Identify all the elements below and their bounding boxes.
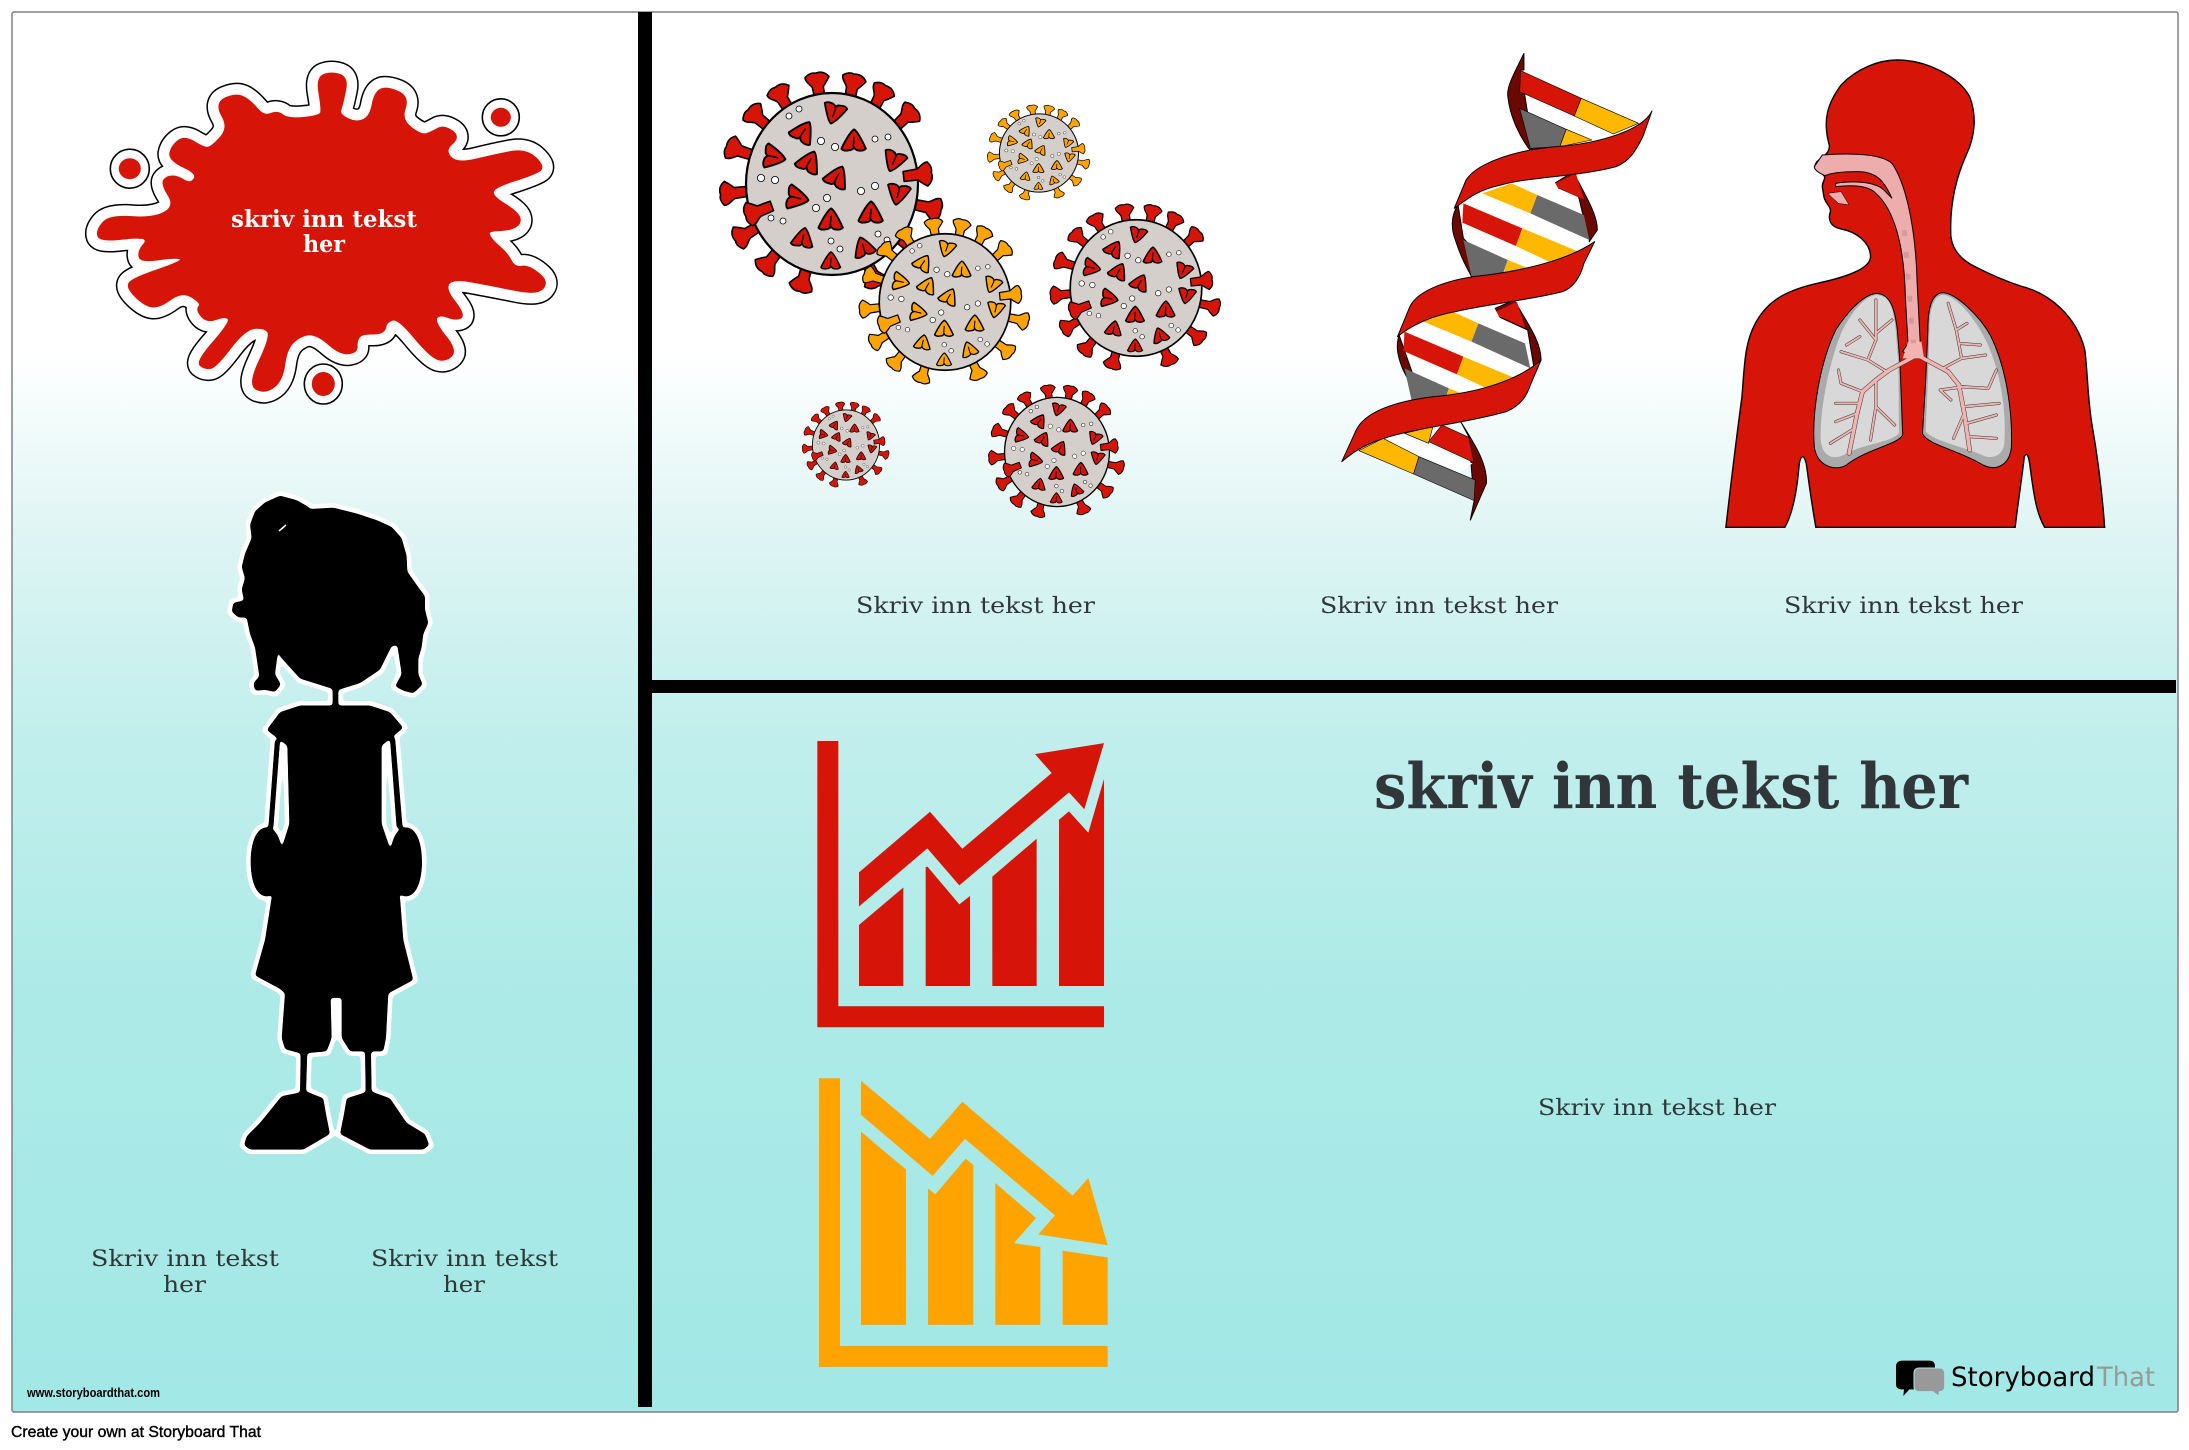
icon: virus cluster [719, 71, 1222, 519]
text: website url: www.storyboardthat.com [26, 1385, 160, 1400]
callout: red splat with text [98, 74, 544, 404]
horizontal divider [652, 680, 2176, 693]
footer text: Create your own at Storyboard That [11, 1424, 262, 1441]
text: body placeholder: Skriv inn tekst her [1538, 1096, 1777, 1121]
text: left captions: her [443, 1273, 486, 1298]
text: left captions: her [163, 1273, 207, 1298]
text: top captions [856, 594, 2024, 619]
vertical divider [638, 12, 652, 1407]
text: left captions: Skriv inn tekst [371, 1247, 558, 1272]
text: top captions: Skriv inn tekst her [1784, 594, 2024, 619]
icon: respiratory system [1726, 60, 2105, 527]
logo: Storyboard That [1896, 1361, 2155, 1396]
text: left captions: Skriv inn tekst [91, 1247, 279, 1272]
icon: DNA helix [1342, 53, 1652, 520]
callout: red splat with text: skriv inn tekst [231, 206, 417, 233]
text: top captions: Skriv inn tekst her [856, 594, 1096, 619]
icon: girl silhouette [232, 496, 429, 1150]
logo: Storyboard That: That [2096, 1362, 2155, 1393]
icon: falling bar chart [819, 1078, 1108, 1367]
logo: Storyboard That: Storyboard [1951, 1362, 2095, 1393]
icon: rising bar chart [817, 741, 1104, 1027]
heading: skriv inn tekst her [1374, 749, 1969, 823]
text: left captions [91, 1247, 558, 1298]
callout: red splat with text: her [303, 231, 346, 258]
text: top captions: Skriv inn tekst her [1320, 594, 1559, 619]
